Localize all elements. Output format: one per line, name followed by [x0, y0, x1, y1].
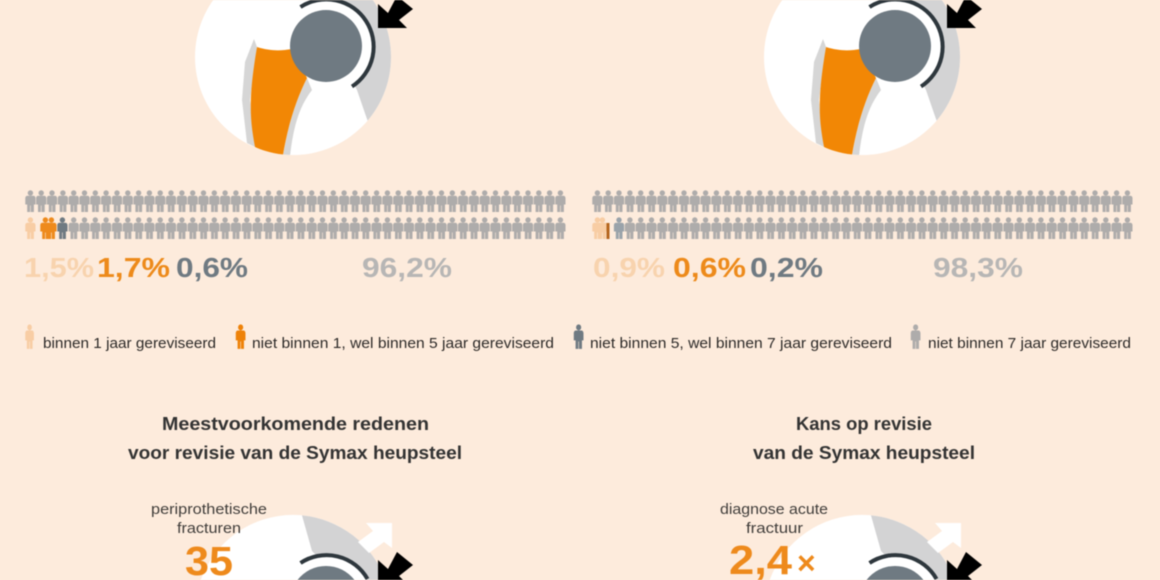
legend item: within 7 years — [574, 324, 892, 352]
callout: periprosthetic fractures — [151, 501, 267, 580]
percentages: left: 96,2% — [362, 252, 452, 283]
callout: periprosthetic fractures: fracturen — [177, 520, 241, 537]
icon: hip implant bottom right — [770, 515, 982, 580]
callout: acute fracture diagnosis: fractuur — [746, 520, 803, 537]
percentages: left — [24, 252, 452, 283]
people chart: left — [25, 190, 566, 239]
people chart: right — [592, 190, 1132, 239]
heading: reasons for revision: Meestvoorkomende redenen — [162, 414, 429, 434]
percentages: right — [593, 252, 1023, 283]
callout: periprosthetic fractures: periprothetische — [151, 501, 267, 518]
heading: chance of revision: Kans op revisie — [796, 414, 932, 434]
legend item: within 5 years: niet binnen 1, wel binnen 5 jaar gereviseerd — [252, 335, 554, 352]
callout: acute fracture diagnosis — [720, 501, 828, 580]
icon: hip implant top right — [764, 0, 989, 160]
heading: reasons for revision — [128, 414, 462, 463]
legend item: within 1 year — [25, 324, 216, 352]
percentages: left: 1,5% — [24, 252, 94, 283]
legend item: within 5 years — [236, 324, 554, 352]
legend item: within 7 years: niet binnen 5, wel binnen 7 jaar gereviseerd — [590, 335, 892, 352]
percentages: left: 1,7% — [97, 252, 170, 283]
legend item: not within 7 years — [911, 324, 1131, 352]
percentages: right: 98,3% — [933, 252, 1023, 283]
heading: chance of revision: van de Symax heupsteel — [753, 443, 975, 463]
percentages: left: 0,6% — [176, 252, 248, 283]
heading: reasons for revision: voor revisie van de Symax heupsteel — [128, 443, 462, 463]
heading: chance of revision — [753, 414, 975, 463]
legend — [25, 324, 1131, 352]
icon: hip implant top left — [195, 0, 420, 160]
percentages: right: 0,6% — [673, 252, 746, 283]
percentages: right: 0,2% — [750, 252, 823, 283]
legend item: not within 7 years: niet binnen 7 jaar gereviseerd — [928, 335, 1131, 352]
icon: hip implant bottom left — [201, 515, 413, 580]
callout: acute fracture diagnosis: diagnose acute — [720, 501, 828, 518]
percentages: right: 0,9% — [593, 252, 665, 283]
callout: acute fracture diagnosis: × — [797, 545, 816, 580]
legend item: within 1 year: binnen 1 jaar gereviseerd — [43, 335, 216, 352]
